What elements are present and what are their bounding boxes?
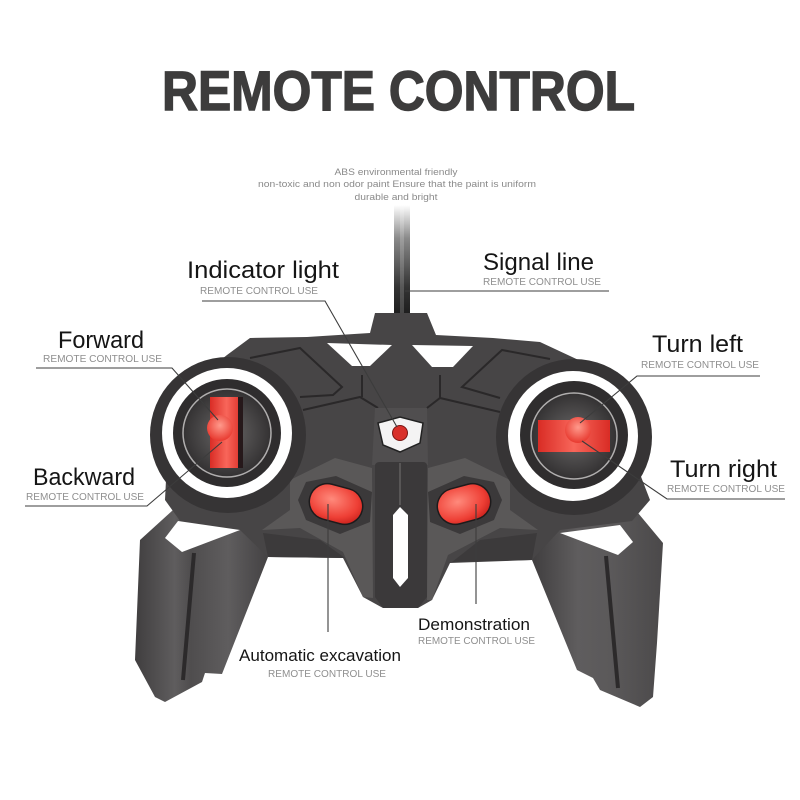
- label: forward: Forward: [58, 327, 144, 354]
- grip cut-out left: [165, 521, 240, 552]
- label: backward: Backward: [33, 464, 135, 491]
- label: indicator light: Indicator light: [187, 257, 339, 284]
- button pod right: [427, 458, 538, 600]
- white chevron right: [412, 345, 473, 367]
- label: indicator light: REMOTE CONTROL USE: [200, 285, 318, 297]
- label: signal line: Signal line: [483, 249, 594, 276]
- label: automatic excavation: [239, 504, 401, 680]
- label: indicator light: [187, 257, 397, 427]
- white chevron left: [327, 343, 392, 366]
- label: automatic excavation: REMOTE CONTROL USE: [268, 668, 386, 680]
- label: demonstration: [418, 504, 535, 647]
- panel seams: [250, 348, 550, 412]
- controller body: [165, 313, 650, 608]
- centre seam: [399, 463, 401, 505]
- centre column: [375, 462, 427, 608]
- label: turn left: REMOTE CONTROL USE: [641, 359, 759, 371]
- right joystick: [496, 359, 652, 515]
- label: automatic excavation: Automatic excavation: [239, 646, 401, 665]
- material description text: durable and bright: [354, 192, 438, 203]
- button: demonstration: [428, 476, 502, 534]
- label: forward: REMOTE CONTROL USE: [43, 353, 162, 365]
- label: turn right: Turn right: [670, 456, 777, 483]
- indicator light: [378, 417, 423, 452]
- material description text: [258, 167, 536, 203]
- label: backward: [25, 442, 222, 506]
- label: demonstration: REMOTE CONTROL USE: [418, 635, 535, 647]
- material description text: non-toxic and non odor paint Ensure that the paint is uniform: [258, 179, 536, 190]
- grip cut-out right: [560, 525, 633, 555]
- label: turn right: [582, 441, 785, 499]
- label: forward: [36, 327, 218, 420]
- indicator housing: [372, 408, 428, 465]
- label: turn right: REMOTE CONTROL USE: [667, 483, 785, 495]
- label: signal line: [405, 249, 609, 291]
- title: REMOTE CONTROL: [162, 59, 635, 122]
- grip grooves: [183, 553, 618, 688]
- label: signal line: REMOTE CONTROL USE: [483, 276, 601, 288]
- right grip: [532, 500, 663, 707]
- label: demonstration: Demonstration: [418, 615, 530, 634]
- remote controller: [135, 313, 663, 707]
- antenna cable: [394, 205, 410, 315]
- left joystick: [150, 357, 306, 513]
- button pod left: [262, 458, 373, 598]
- button: automatic excavation: [298, 476, 372, 534]
- label: turn left: [580, 331, 760, 423]
- lower shadow bars: [263, 533, 537, 562]
- material description text: ABS environmental friendly: [334, 167, 458, 178]
- label: backward: REMOTE CONTROL USE: [26, 491, 144, 503]
- label: turn left: Turn left: [652, 331, 743, 358]
- white centre slot: [393, 507, 408, 587]
- left grip: [135, 500, 268, 702]
